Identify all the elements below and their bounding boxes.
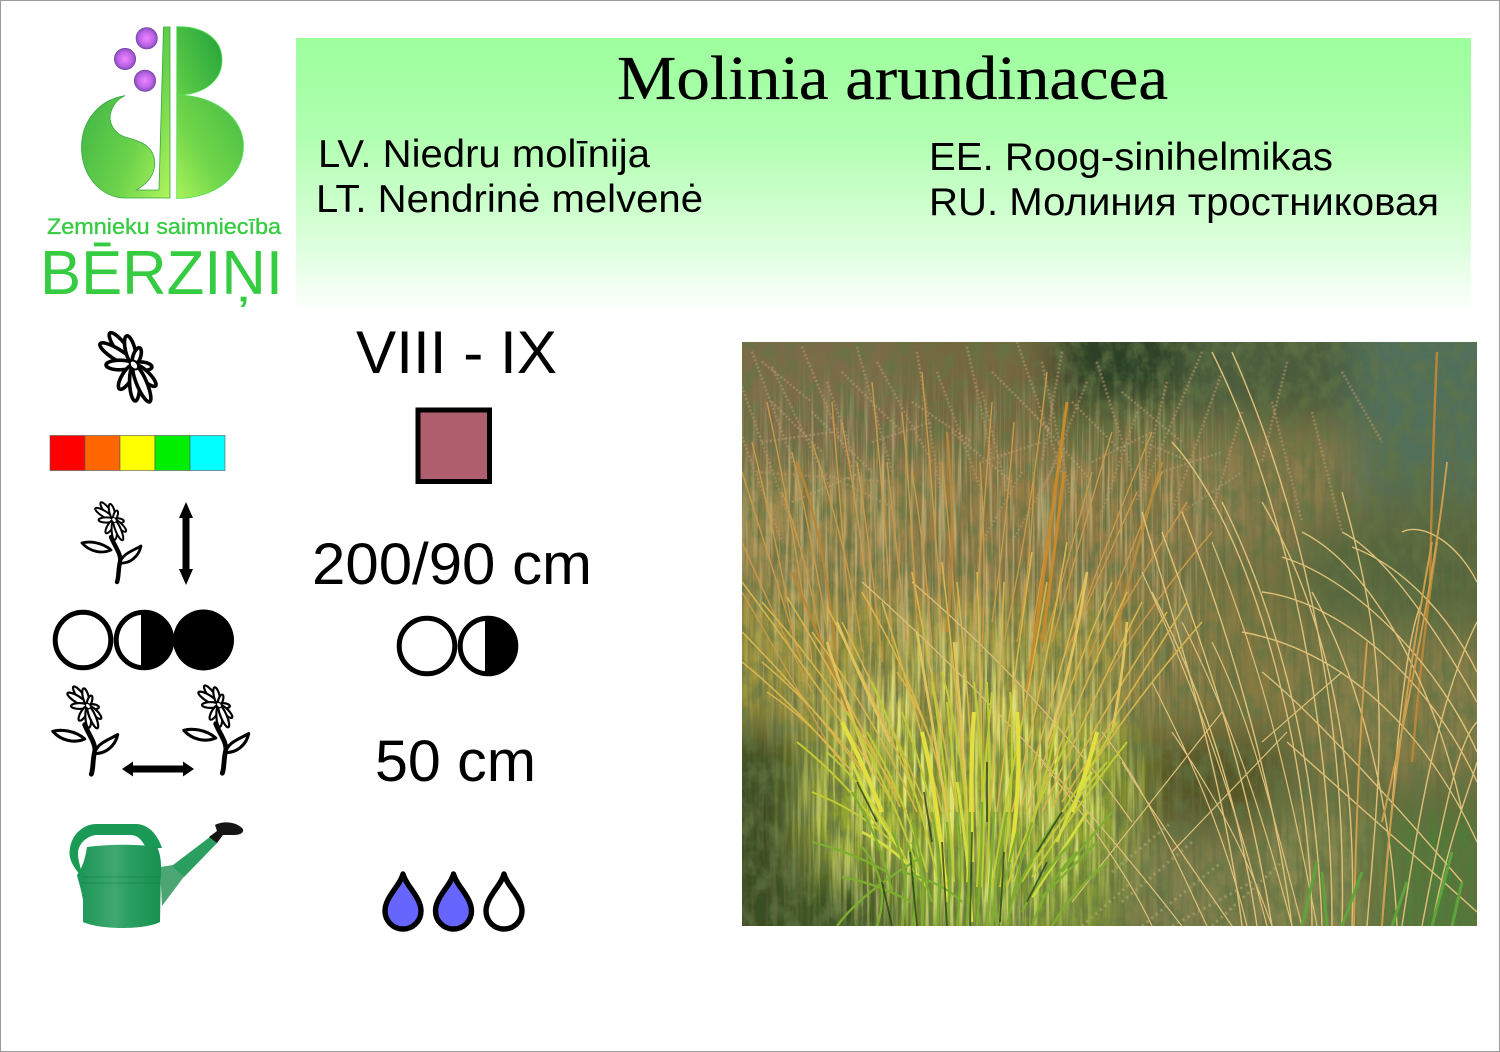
- photo: light stem streaks: [742, 373, 1232, 764]
- photo: pale arching stems: [862, 352, 1477, 926]
- photo: green lower leaves: [812, 792, 1462, 926]
- logo: B lower lobe: [177, 95, 244, 198]
- flowering period value: VIII - IX: [356, 319, 557, 386]
- flower colour swatch: [418, 410, 490, 482]
- photo: Molinia arundinacea grass clump: [742, 342, 1477, 926]
- name: Lithuanian: LT. Nendrinė melvenė: [316, 178, 703, 221]
- logo: subtitle: Zemnieku saimniecība: [47, 214, 282, 239]
- photo: flower panicles: [742, 342, 1382, 542]
- logo: Bērziņi farm: [40, 27, 283, 308]
- icon: water drops: [385, 874, 522, 929]
- name: Latvian: LV. Niedru molīnija: [318, 133, 651, 176]
- photo: pale lower debris: [1082, 822, 1282, 926]
- photo: dark gaps between lower leaves: [857, 762, 1062, 926]
- photo: foliage texture: [742, 342, 1477, 926]
- photo: amber upper stems: [742, 352, 1437, 762]
- photo: dark stem streaks: [742, 430, 1477, 926]
- photo: yellow-green tuft: [797, 672, 1127, 922]
- icon: watering can: [70, 822, 243, 928]
- icon: light scale: [55, 610, 234, 670]
- logo: purple berries: [114, 28, 157, 91]
- name: Russian: RU. Молиния тростниковая: [929, 181, 1439, 224]
- photo: yellow tuft streaks: [763, 604, 1163, 926]
- logo: S and stem shape: [82, 27, 170, 198]
- icon: plant spacing: [53, 684, 249, 776]
- light requirement value: [399, 616, 516, 676]
- logo: wordmark: BĒRZIŅI: [40, 239, 283, 308]
- icon: plant height: [82, 501, 193, 585]
- header panel: [296, 38, 1471, 314]
- icon: colour scale: [50, 436, 225, 470]
- name: Estonian: EE. Roog-sinihelmikas: [929, 136, 1333, 179]
- spacing value: 50 cm: [375, 729, 536, 794]
- height and width value: 200/90 cm: [312, 532, 592, 597]
- photo: golden mid stems: [742, 542, 1202, 842]
- arrow: vertical: [179, 502, 193, 585]
- logo: B upper lobe: [177, 27, 222, 95]
- icon: flowering period: [97, 330, 159, 404]
- title: Molinia arundinacea: [617, 45, 1168, 113]
- arrow: horizontal: [122, 762, 194, 776]
